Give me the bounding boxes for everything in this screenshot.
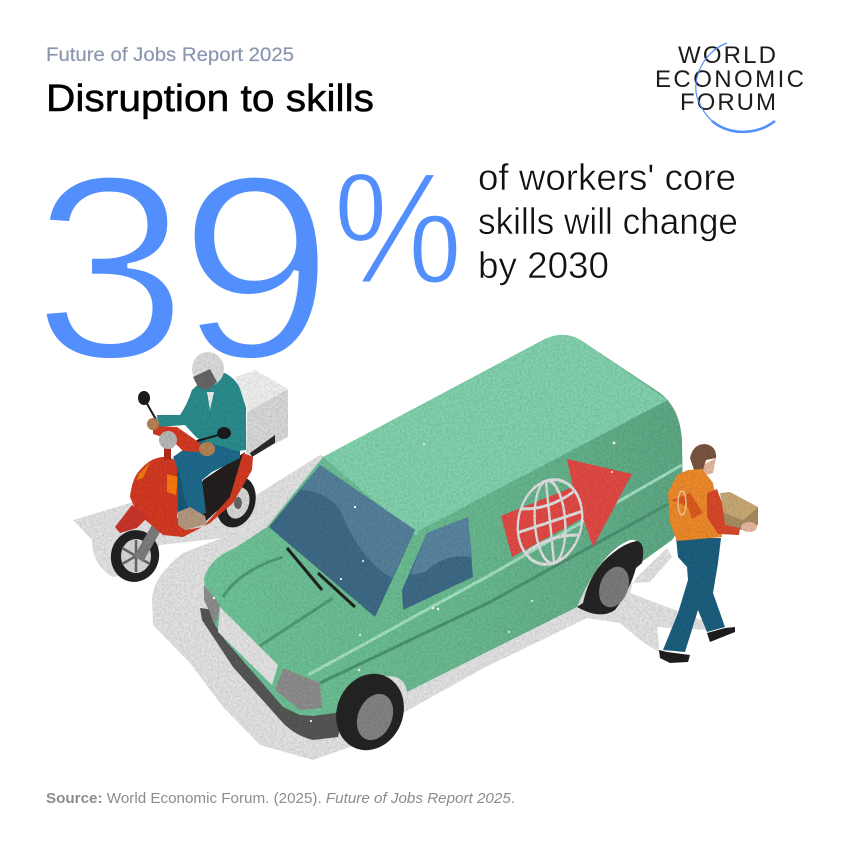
- big statistic: 39%: [33, 122, 463, 414]
- statistic description: [478, 157, 738, 286]
- side window: [402, 517, 473, 610]
- source line: Source: World Economic Forum. (2025). Future of Jobs Report 2025 .: [46, 791, 515, 807]
- statistic description: skills will change: [478, 201, 738, 242]
- statistic description: of workers' core: [478, 157, 736, 198]
- jacket: [668, 469, 757, 541]
- van body: [204, 335, 683, 716]
- rider helmet: [192, 352, 224, 390]
- front bumper: [200, 608, 345, 740]
- person carrying parcel: [659, 444, 758, 663]
- rear wheel: [210, 471, 262, 533]
- windshield: [269, 465, 415, 617]
- paper specks: [213, 442, 615, 722]
- shoes: [659, 627, 735, 663]
- illustration: delivery scene: [73, 335, 758, 761]
- parcel: [720, 492, 758, 530]
- scooter body: [115, 448, 253, 537]
- rear wheel: [577, 541, 643, 614]
- delivery scooter and rider: [105, 352, 288, 587]
- trousers: [663, 538, 725, 652]
- handlebars and mirrors: [138, 391, 231, 456]
- rider legs: [173, 438, 240, 530]
- delivery box: [235, 370, 288, 458]
- head: [690, 444, 716, 476]
- logo: World Economic Forum: FORUM: [680, 89, 776, 116]
- delivery van: [200, 335, 683, 761]
- logo: World Economic Forum: WORLD: [678, 42, 776, 69]
- front wheel: [325, 663, 415, 761]
- title: Disruption to skills: [46, 78, 374, 120]
- front wheel: [105, 525, 165, 587]
- big statistic: 39%: %: [333, 140, 463, 317]
- van roof: [323, 335, 668, 536]
- ground shadows: [73, 455, 707, 760]
- logo: World Economic Forum: [655, 42, 804, 132]
- van body lines: [223, 465, 682, 683]
- front lights: [204, 585, 322, 710]
- big statistic: 39%: 39: [33, 122, 325, 414]
- van logo: globe: [514, 470, 586, 574]
- van logo: arrow: [501, 459, 632, 557]
- subtitle: Future of Jobs Report 2025: [46, 44, 294, 66]
- logo: World Economic Forum: ECONOMIC: [655, 66, 804, 93]
- rider jacket: [157, 373, 246, 451]
- headlight panel: [218, 607, 278, 685]
- statistic description: by 2030: [478, 245, 609, 286]
